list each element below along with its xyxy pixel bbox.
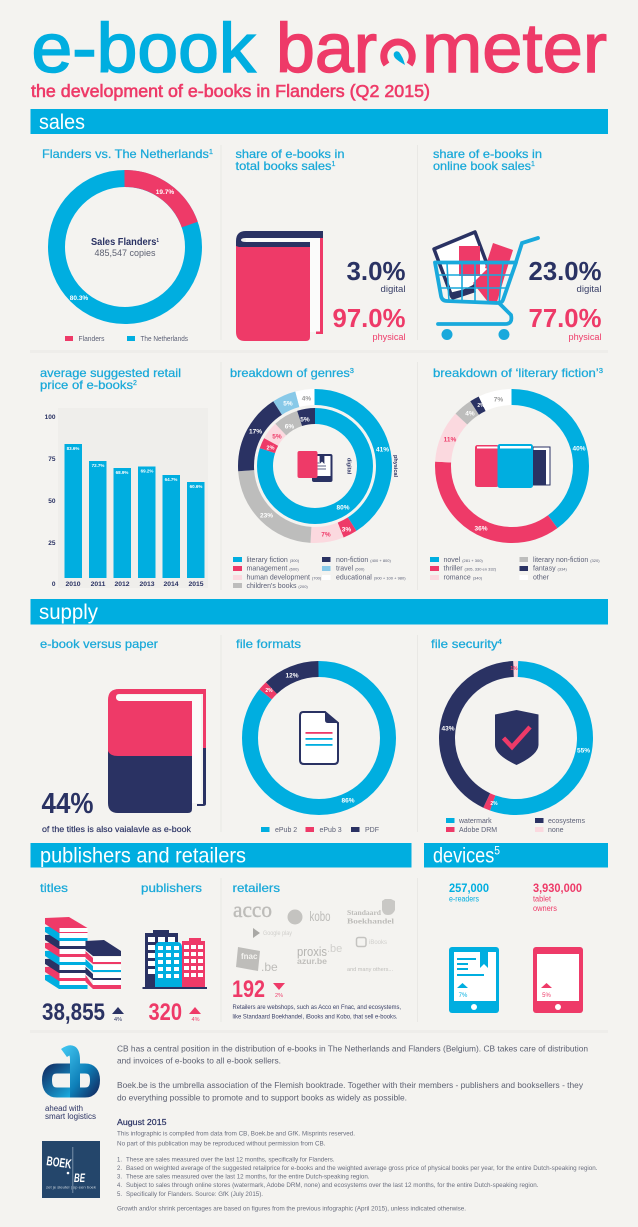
icon: buildings xyxy=(142,930,207,989)
legend: Flanders xyxy=(78,336,105,343)
donut value labels: 2% xyxy=(490,801,498,807)
panel: file formats xyxy=(236,637,388,834)
bar chart: price by year: 64.7% xyxy=(165,477,177,482)
icon: tablet: 5% xyxy=(542,993,552,999)
legend: literary fiction (300) xyxy=(246,557,299,564)
bar chart: price by year: 0 xyxy=(52,581,56,588)
text block: about CB: and invoices of e-books to all e-book sellers. xyxy=(117,1056,281,1066)
donut value labels: 80% xyxy=(336,504,350,512)
bar chart: price by year: 72.7% xyxy=(92,463,104,468)
donut value labels: 2% xyxy=(265,688,273,694)
section bar: publishers and retailers: publishers and retailers xyxy=(40,844,246,868)
stat: e-readers: 257,000 xyxy=(449,881,489,895)
retailer logos: fnac xyxy=(241,952,258,961)
bar chart: price by year: 50 xyxy=(48,498,56,505)
legend: Adobe DRM xyxy=(459,827,497,834)
donut value labels: 5% xyxy=(283,400,293,408)
text block: date: August 2015 xyxy=(117,1117,167,1127)
heading: 3 xyxy=(599,368,603,375)
caption: of the titles is also vaialavle as e-book xyxy=(42,824,192,834)
icon: up arrow with 4% xyxy=(189,1007,201,1023)
ring labels: physical xyxy=(392,455,398,477)
heading: 3 xyxy=(350,368,354,375)
heading: total books sales xyxy=(236,159,332,173)
logo: Boek.be: BE xyxy=(74,1171,86,1185)
panel: average suggested retail price xyxy=(40,366,208,588)
heading: 1 xyxy=(332,161,336,168)
icon: shopping cart xyxy=(434,232,538,340)
icon: up arrow with 4%: 4% xyxy=(192,1017,200,1023)
text block: about CB: CB has a central position in the distribution of e-books in The Netherlands and Flanders (Belgium). CB takes care of distribution xyxy=(117,1044,588,1054)
panel: share of e-books in total book sales xyxy=(236,147,406,342)
heading: 1 xyxy=(209,149,213,156)
retailer logos: iBooks xyxy=(369,940,387,946)
stat: physical: 97.0% xyxy=(332,303,406,333)
section bar: devices: 5 xyxy=(494,844,500,858)
stat: physical: physical xyxy=(372,332,406,342)
stat: retailers count: 192 xyxy=(232,976,265,1003)
legend: none xyxy=(548,827,564,834)
heading: average suggested retail xyxy=(40,366,181,380)
legend: PDF xyxy=(365,827,379,834)
legend: ecosystems xyxy=(548,818,585,825)
donut value labels: 12% xyxy=(285,672,299,680)
heading: publishers xyxy=(141,881,202,895)
text block: credits: No part of this publication may be reproduced without permission from CB. xyxy=(117,1142,326,1148)
donut value labels: 86% xyxy=(341,798,355,804)
icon: document xyxy=(300,712,338,764)
icon: shield with check xyxy=(495,710,538,765)
title: e-book xyxy=(32,9,257,87)
legend: human development (700) xyxy=(246,574,321,582)
donut value labels: 55% xyxy=(577,748,590,754)
legend: The Netherlands xyxy=(140,336,188,343)
bar chart: price by year: 2014 xyxy=(163,581,179,588)
legend: novel (281 + 300) xyxy=(444,557,483,564)
donut centre text xyxy=(91,237,159,259)
legend: ePub 2 xyxy=(275,827,297,834)
panel: share of e-books in online book sales xyxy=(433,147,602,342)
logo: Boek.be: BOEK xyxy=(46,1153,73,1172)
bar chart: price by year: 2013 xyxy=(139,581,155,588)
icon: e-reader: 7% xyxy=(459,993,468,999)
footnotes: These are sales measured over the last 12 months, specifically for Flanders. xyxy=(126,1158,335,1164)
panel: file security xyxy=(431,637,590,834)
footnotes: Based on weighted average of the suggested retailprice for e-books and the weighted average gross price of physical books per year, for the entire Dutch-speaking region. xyxy=(126,1166,598,1172)
panel: devices xyxy=(449,881,583,1013)
legend xyxy=(446,818,585,834)
stat: e-readers xyxy=(449,881,489,904)
retailer logos: proxis xyxy=(297,944,327,959)
donut chart: file formats xyxy=(250,669,388,807)
stat: physical: physical xyxy=(568,332,602,342)
logo: CB xyxy=(45,1050,96,1121)
legend: children's books (200) xyxy=(246,583,308,590)
panel: e-book versus paper xyxy=(40,637,206,834)
stat: digital: digital xyxy=(380,284,406,294)
donut value labels: 1% xyxy=(510,666,518,672)
stat: tablet owners: 3,930,000 xyxy=(533,881,582,895)
donut value labels: 2% xyxy=(267,446,275,452)
icon: stacks of books xyxy=(45,917,121,989)
legend: non-fiction (400 + 800) xyxy=(336,557,391,564)
footnotes: 3. xyxy=(117,1174,122,1180)
donut centre text: 485,547 copies xyxy=(94,248,156,259)
legend xyxy=(430,557,600,582)
title: bar xyxy=(276,9,377,87)
logo: Boek.be xyxy=(42,1141,100,1198)
donut value labels xyxy=(265,672,355,804)
heading: 1 xyxy=(531,161,535,168)
heading: breakdown of genres xyxy=(230,366,342,380)
retailer logos: .be xyxy=(261,960,278,974)
retailer logos: azur.be xyxy=(297,956,327,966)
donut value labels: 7% xyxy=(494,396,503,404)
heading: share of e-books in xyxy=(433,147,542,161)
stat: titles count: 38,855 xyxy=(42,999,105,1026)
icon: book xyxy=(236,231,323,341)
retailers description: like Standaard Boekhandel, iBooks and Kobo, that sell e-books. xyxy=(232,1014,398,1020)
footnotes: 5. xyxy=(117,1192,122,1198)
section bar: supply: supply xyxy=(39,601,98,624)
donut value labels: 43% xyxy=(441,726,455,732)
icon: up arrow with 4% xyxy=(112,1007,124,1023)
footnotes: Specifically for Flanders. Source: GfK (July 2015). xyxy=(126,1192,263,1198)
text block: about Boek.be: Boek.be is the umbrella association of the Flemish booktrade. Together with their members - publishers and booksellers - they xyxy=(117,1080,584,1090)
donut chart: file security xyxy=(445,667,587,809)
title xyxy=(32,9,607,87)
heading: retailers xyxy=(232,881,280,895)
donut value labels: 4% xyxy=(465,410,475,418)
legend: other xyxy=(533,574,550,582)
logo tagline: ahead with xyxy=(45,1104,83,1113)
bar chart: price by year: 75 xyxy=(48,456,56,463)
legend: watermark xyxy=(458,818,492,825)
subtitle: the development of e-books in Flanders (Q2 2015) xyxy=(31,81,430,101)
panel: Flanders vs The Netherlands: 80.3% xyxy=(70,295,88,302)
icon: three books xyxy=(475,444,550,488)
bar chart: price by year: 68.9% xyxy=(116,470,128,475)
donut value labels: 7% xyxy=(321,532,331,538)
section bar: sales xyxy=(30,109,608,134)
section bar: devices xyxy=(424,843,608,868)
logo tagline: smart logistics xyxy=(45,1112,96,1121)
footnotes xyxy=(117,1158,598,1198)
footnotes: 1. xyxy=(117,1158,122,1164)
bar chart: price by year: 2015 xyxy=(188,581,204,588)
legend xyxy=(65,336,188,343)
donut value labels: 4% xyxy=(302,396,311,402)
icon: half-filled book xyxy=(108,689,206,813)
bar chart: price by year: 100 xyxy=(45,414,56,421)
legend: fantasy (334) xyxy=(533,566,567,572)
donut value labels: 36% xyxy=(474,526,488,532)
heading: share of e-books in xyxy=(236,147,344,161)
donut value labels: 41% xyxy=(376,446,389,454)
icon: book and tablet xyxy=(298,451,332,482)
donut value labels: 2% xyxy=(477,403,485,409)
donut value labels: 40% xyxy=(572,446,586,452)
legend: literary non-fiction (320) xyxy=(533,557,600,564)
bar chart: price by year: 25 xyxy=(48,540,56,547)
legend xyxy=(261,827,379,834)
icon: down arrow with 2% xyxy=(273,983,285,999)
bar chart: price by year: 69.2% xyxy=(141,468,153,474)
retailer logos: Google play xyxy=(263,930,293,937)
donut value labels xyxy=(444,396,586,532)
bar chart: price by year: 2011 xyxy=(91,581,106,588)
footnotes: 4. xyxy=(117,1183,122,1189)
retailer logos xyxy=(233,897,395,974)
legend: thriller (305, 330 en 332) xyxy=(444,566,496,572)
legend: management (600) xyxy=(246,566,299,572)
legend: educational (900 + 100 + 980) xyxy=(336,574,406,582)
bar chart: price by year: 2012 xyxy=(114,581,130,588)
panel: titles xyxy=(40,881,124,1026)
panel: Flanders vs The Netherlands xyxy=(42,147,213,343)
heading: e-book versus paper xyxy=(40,637,158,651)
logo: Boek.be: zet je sleutel | op een boek xyxy=(46,1184,96,1190)
stat: 44%: 44% xyxy=(42,788,94,820)
donut value labels: 17% xyxy=(249,428,262,436)
footnotes: Subject to sales through online stores (watermark, Adobe DRM, none) and ecosystems over the last 12 months, for the entire Dutch-speaking region. xyxy=(126,1183,539,1189)
stat: tablet owners: tablet xyxy=(533,894,552,904)
panel: publishers xyxy=(141,881,207,1026)
icon: up arrow with 4%: 4% xyxy=(114,1017,122,1023)
section bar: sales: sales xyxy=(39,111,85,134)
panel: retailers xyxy=(232,881,401,1020)
donut value labels xyxy=(249,396,389,538)
donut centre text: 1 xyxy=(156,238,159,244)
stat: tablet owners xyxy=(533,881,582,913)
heading: online book sales xyxy=(433,159,531,173)
legend: travel (500) xyxy=(336,566,364,572)
bar chart: price by year: 83.6% xyxy=(67,446,79,451)
retailers description: Retailers are webshops, such as Acco en Fnac, and ecosystems, xyxy=(232,1004,401,1011)
bar chart: price by year: 60.6% xyxy=(190,484,202,489)
heading: 2 xyxy=(133,380,137,387)
donut chart: digital genres xyxy=(265,416,365,516)
donut chart: literary fiction xyxy=(443,397,581,535)
stat: e-readers: e-readers xyxy=(449,894,479,904)
donut value labels: 5% xyxy=(272,434,282,440)
retailer logos: Boekhandel xyxy=(347,916,394,926)
bar chart: price by year: 2010 xyxy=(65,581,81,588)
donut value labels xyxy=(441,666,590,807)
stat: tablet owners: owners xyxy=(533,904,557,913)
footnotes: 2. xyxy=(117,1166,122,1172)
donut chart: sales share xyxy=(56,178,194,316)
donut chart: physical genres xyxy=(246,397,384,535)
stat: digital: digital xyxy=(576,284,602,294)
text block: credits: This infographic is compiled from data from CB, Boek.be and GfK. Misprints reserved. xyxy=(117,1132,355,1138)
heading: titles xyxy=(40,881,68,895)
section bar: supply xyxy=(30,599,608,624)
retailer logos: and many others... xyxy=(347,967,393,973)
panel: breakdown of literary fiction xyxy=(430,366,603,582)
donut value labels: 6% xyxy=(285,424,294,430)
retailer logos: acco xyxy=(233,897,272,922)
heading: file formats xyxy=(236,637,301,651)
icon: down arrow with 2%: 2% xyxy=(275,993,283,999)
legend: romance (340) xyxy=(444,574,482,582)
donut value labels: 23% xyxy=(260,512,273,520)
donut centre text: Sales Flanders xyxy=(91,237,162,248)
legend xyxy=(233,557,406,590)
text block: about Boek.be: do everything possible to promote and to support books as widely as possible. xyxy=(117,1092,407,1102)
stat: publishers count: 320 xyxy=(148,999,182,1026)
heading: file security xyxy=(431,637,491,651)
retailer logos: .be xyxy=(327,943,342,955)
section bar: devices: devices xyxy=(433,844,504,868)
stat: physical: 77.0% xyxy=(528,303,602,333)
stat: digital: 23.0% xyxy=(528,256,602,286)
panel: Flanders vs The Netherlands: 19.7% xyxy=(156,189,174,196)
donut value labels: 5% xyxy=(300,416,310,424)
heading: breakdown of ‘literary fiction’ xyxy=(433,366,584,380)
panel: breakdown of genres xyxy=(230,366,406,590)
note: growth percentages: Growth and/or shrink percentages are based on figures from the previous infographic (April 2015), unless indicated otherwise. xyxy=(117,1206,466,1212)
donut value labels: 11% xyxy=(444,436,457,444)
ring labels xyxy=(346,455,398,477)
ring labels: digital xyxy=(346,458,352,475)
heading: 4 xyxy=(498,639,502,646)
heading: price of e-books xyxy=(40,378,133,392)
retailer logos: Standaard xyxy=(347,908,382,917)
footnotes: These are sales measured over the last 12 months, for the entire Dutch-speaking region. xyxy=(126,1174,370,1180)
heading: Flanders vs. The Netherlands xyxy=(42,147,199,161)
legend: ePub 3 xyxy=(320,827,342,834)
donut value labels: 3% xyxy=(342,526,351,534)
bar chart: price by year xyxy=(45,408,208,588)
title: meter xyxy=(422,9,607,87)
stat: digital: 3.0% xyxy=(346,256,406,286)
section bar: publishers and retailers xyxy=(30,843,412,868)
retailer logos: kobo xyxy=(310,908,331,924)
